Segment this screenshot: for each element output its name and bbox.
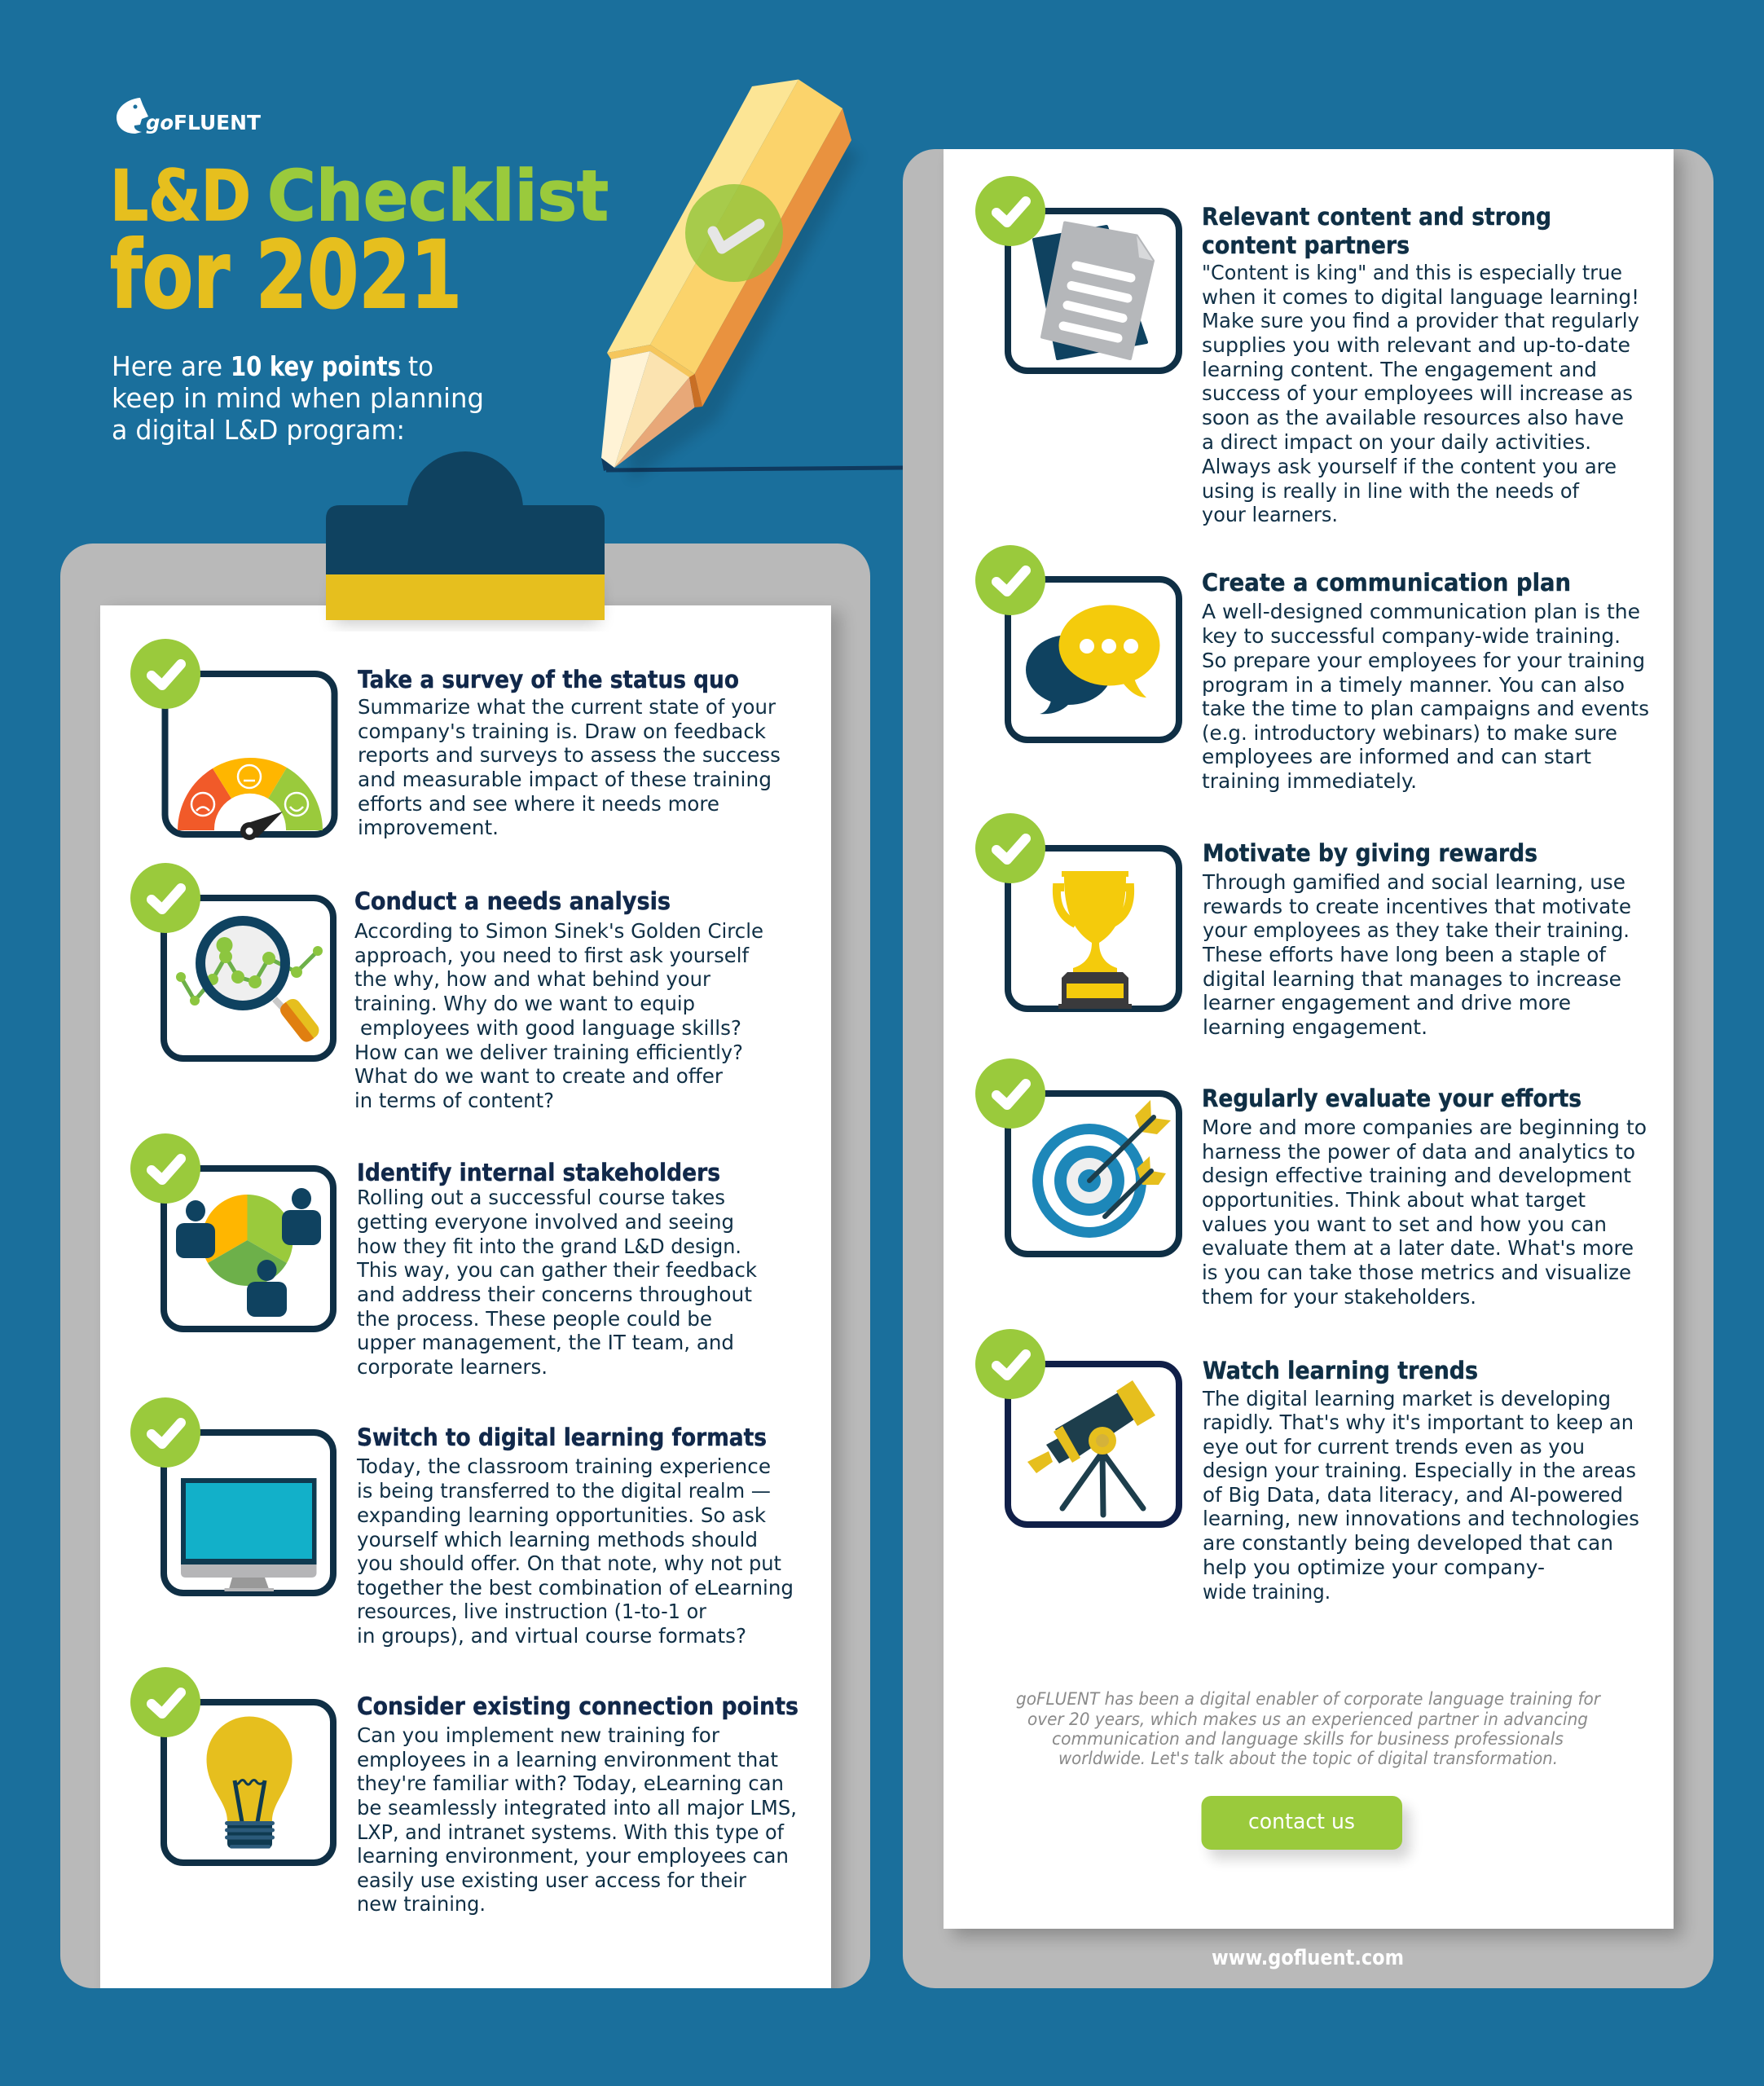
body text: success of your employees will increase as — [1202, 381, 1633, 405]
icon: gauge — [165, 674, 334, 840]
body text: efforts and see where it needs more — [358, 792, 719, 816]
body text — [1202, 261, 1639, 526]
heading — [1202, 203, 1551, 259]
body text — [354, 919, 763, 1112]
body text: training. Why do we want to equip — [354, 992, 695, 1015]
left clipboard panel — [60, 544, 870, 2013]
body text: getting everyone involved and seeing — [357, 1210, 734, 1234]
body text: program in a timely manner. You can also — [1202, 673, 1625, 697]
body text: the why, how and what behind your — [354, 967, 711, 991]
icon: documents — [1008, 211, 1179, 371]
intro text: Here are — [112, 350, 222, 382]
body text: opportunities. Think about what target — [1202, 1188, 1586, 1212]
body text: and measurable impact of these training — [358, 768, 772, 791]
body text: expanding learning opportunities. So ask — [357, 1503, 767, 1527]
body text: yourself which learning methods should — [357, 1528, 758, 1551]
clipboard clip — [326, 451, 605, 623]
item 7: communication plan — [975, 545, 1649, 793]
body text: "Content is king" and this is especially true — [1202, 261, 1622, 284]
title — [110, 156, 609, 329]
body text: new training. — [357, 1892, 486, 1916]
intro text — [112, 350, 484, 446]
check badge — [130, 1133, 200, 1204]
heading: Consider existing connection points — [357, 1692, 798, 1720]
item 9: evaluate — [975, 1058, 1647, 1309]
body text: learner engagement and drive more — [1203, 991, 1571, 1014]
heading: Identify internal stakeholders — [357, 1159, 720, 1186]
body text: how they fit into the grand L&D design. — [357, 1234, 741, 1258]
body text — [356, 1186, 758, 1379]
body text: learning content. The engagement and — [1202, 358, 1597, 381]
body text: learning engagement. — [1203, 1015, 1427, 1039]
heading: content partners — [1202, 231, 1410, 259]
check badge — [975, 176, 1045, 246]
body text: using is really in line with the needs of — [1202, 479, 1580, 503]
heading: Take a survey of the status quo — [358, 666, 739, 693]
intro text: to — [408, 350, 433, 382]
footer text — [1016, 1689, 1601, 1768]
body text: eye out for current trends even as you — [1203, 1435, 1585, 1459]
body text: harness the power of data and analytics to — [1202, 1140, 1635, 1164]
body text: The digital learning market is developing — [1202, 1387, 1611, 1410]
title: L&D — [110, 156, 251, 237]
check badge — [975, 545, 1045, 615]
body text — [1202, 1387, 1639, 1604]
footer text: goFLUENT has been a digital enabler of corporate language training for — [1016, 1689, 1601, 1709]
body text: corporate learners. — [357, 1355, 548, 1379]
intro text: keep in mind when planning — [112, 382, 484, 414]
check badge — [130, 1397, 200, 1468]
body text: employees with good language skills? — [360, 1016, 741, 1040]
body text: Always ask yourself if the content you are — [1202, 455, 1617, 478]
body text: training immediately. — [1202, 769, 1417, 793]
body text: upper management, the IT team, and — [357, 1331, 734, 1354]
body text: a direct impact on your daily activities. — [1202, 430, 1591, 454]
icon: speech bubbles — [1008, 579, 1179, 740]
heading: Watch learning trends — [1203, 1357, 1478, 1384]
item 8: rewards — [975, 813, 1631, 1039]
item 4: digital formats — [130, 1397, 794, 1648]
body text: is being transferred to the digital realm — — [357, 1479, 771, 1503]
body text: design effective training and development — [1202, 1164, 1631, 1187]
logo: go — [146, 111, 174, 134]
body text: take the time to plan campaigns and events — [1202, 697, 1649, 720]
body text: when it comes to digital language learning! — [1202, 285, 1639, 309]
body text: evaluate them at a later date. What's more — [1202, 1236, 1634, 1260]
check badge — [975, 813, 1045, 883]
logo — [117, 98, 261, 134]
body text: Today, the classroom training experience — [356, 1454, 771, 1478]
heading: Regularly evaluate your efforts — [1202, 1085, 1581, 1112]
body text: improvement. — [358, 816, 499, 839]
body text: learning, new innovations and technologies — [1203, 1507, 1639, 1530]
body text: your employees as they take their training. — [1203, 918, 1630, 942]
icon: monitor — [164, 1432, 333, 1593]
heading: Motivate by giving rewards — [1203, 839, 1537, 867]
body text: in terms of content? — [354, 1089, 554, 1112]
body text: and address their concerns throughout — [357, 1283, 752, 1306]
logo: FLUENT — [174, 111, 261, 134]
body text: they're familiar with? Today, eLearning can — [357, 1771, 784, 1795]
body text: design your training. Especially in the areas — [1203, 1459, 1636, 1482]
item 5: connection points — [130, 1667, 798, 1916]
item 6: relevant content — [975, 176, 1639, 526]
body text: Through gamified and social learning, use — [1202, 870, 1625, 894]
body text: resources, live instruction (1-to-1 or — [357, 1600, 707, 1623]
body text: is you can take those metrics and visualize — [1202, 1261, 1631, 1284]
body text: are constantly being developed that can — [1203, 1531, 1613, 1555]
body text: your learners. — [1202, 503, 1338, 526]
heading: Relevant content and strong — [1202, 203, 1551, 231]
check badge — [975, 1329, 1045, 1399]
footer text: worldwide. Let's talk about the topic of digital transformation. — [1058, 1749, 1558, 1768]
icon: light bulb — [164, 1702, 333, 1863]
body text: rapidly. That's why it's important to keep an — [1203, 1410, 1634, 1434]
body text: you should offer. On that note, why not put — [357, 1551, 781, 1575]
title: Checklist — [267, 156, 609, 237]
body text: wide training. — [1203, 1580, 1331, 1604]
icon: telescope — [1008, 1364, 1179, 1525]
body text: company's training is. Draw on feedback — [358, 720, 767, 743]
body text: LXP, and intranet systems. With this type of — [357, 1820, 785, 1844]
body text — [356, 1454, 794, 1648]
body text: of Big Data, data literacy, and AI-powered — [1203, 1483, 1623, 1507]
intro text: 10 key points — [231, 350, 401, 382]
right clipboard panel — [903, 149, 1713, 1988]
body text: This way, you can gather their feedback — [356, 1258, 758, 1282]
body text: A well-designed communication plan is the — [1202, 600, 1640, 623]
body text: Summarize what the current state of your — [358, 695, 776, 719]
item 2: needs analysis — [130, 863, 763, 1112]
body text — [358, 695, 781, 839]
check badge — [130, 863, 200, 933]
body text: values you want to set and how you can — [1202, 1212, 1607, 1236]
body text: learning environment, your employees can — [357, 1844, 789, 1868]
title: for 2021 — [110, 221, 462, 329]
body text — [357, 1723, 797, 1916]
body text: the process. These people could be — [357, 1307, 712, 1331]
body text: help you optimize your company- — [1203, 1556, 1545, 1579]
pencil — [601, 80, 860, 481]
intro text: a digital L&D program: — [112, 414, 405, 446]
body text: be seamlessly integrated into all major LMS, — [357, 1796, 797, 1820]
body text — [1202, 600, 1649, 793]
body text — [1202, 1116, 1647, 1309]
body text: Rolling out a successful course takes — [357, 1186, 725, 1209]
body text: What do we want to create and offer — [354, 1064, 724, 1088]
footer text: communication and language skills for business professionals — [1052, 1729, 1564, 1749]
body text: employees in a learning environment that — [357, 1748, 778, 1771]
item 1: survey — [130, 639, 781, 840]
body text: These efforts have long been a staple of — [1202, 943, 1607, 966]
check badge — [130, 639, 200, 709]
icon: magnifier — [164, 898, 333, 1058]
body text: How can we deliver training efficiently? — [354, 1041, 743, 1064]
body text: together the best combination of eLearning — [357, 1576, 794, 1600]
body text — [1202, 870, 1631, 1039]
body text: easily use existing user access for their — [357, 1868, 747, 1892]
body text: rewards to create incentives that motivate — [1203, 895, 1631, 918]
body text: Can you implement new training for — [357, 1723, 720, 1747]
website url: www.gofluent.com — [1212, 1946, 1404, 1970]
check badge — [975, 1058, 1045, 1129]
body text: employees are informed and can start — [1202, 745, 1591, 768]
heading: Conduct a needs analysis — [354, 887, 671, 915]
body text: Make sure you find a provider that regularly — [1202, 309, 1639, 332]
contact button: contact us — [1248, 1810, 1355, 1834]
body text: More and more companies are beginning to — [1202, 1116, 1647, 1139]
body text: (e.g. introductory webinars) to make sure — [1202, 721, 1617, 745]
icon: stakeholders pie — [164, 1168, 333, 1329]
body text: soon as the available resources also have — [1202, 406, 1624, 429]
body text: digital learning that manages to increase — [1203, 967, 1621, 991]
icon: trophy — [1008, 848, 1179, 1009]
pencil line — [606, 468, 903, 470]
contact button — [1201, 1796, 1410, 1859]
check badge — [130, 1667, 200, 1737]
body text: key to successful company-wide training. — [1202, 624, 1621, 648]
icon: target — [1008, 1094, 1179, 1254]
body text: According to Simon Sinek's Golden Circle — [354, 919, 763, 943]
heading: Create a communication plan — [1202, 569, 1571, 596]
heading: Switch to digital learning formats — [357, 1424, 767, 1451]
item 3: stakeholders — [130, 1133, 758, 1379]
body text: supplies you with relevant and up-to-date — [1202, 333, 1630, 357]
body text: approach, you need to first ask yourself — [354, 944, 750, 967]
body text: them for your stakeholders. — [1202, 1285, 1476, 1309]
body text: in groups), and virtual course formats? — [357, 1624, 746, 1648]
body text: reports and surveys to assess the success — [358, 743, 781, 767]
body text: So prepare your employees for your training — [1202, 649, 1645, 672]
footer text: over 20 years, which makes us an experienced partner in advancing — [1027, 1710, 1588, 1729]
item 10: trends — [975, 1329, 1639, 1604]
